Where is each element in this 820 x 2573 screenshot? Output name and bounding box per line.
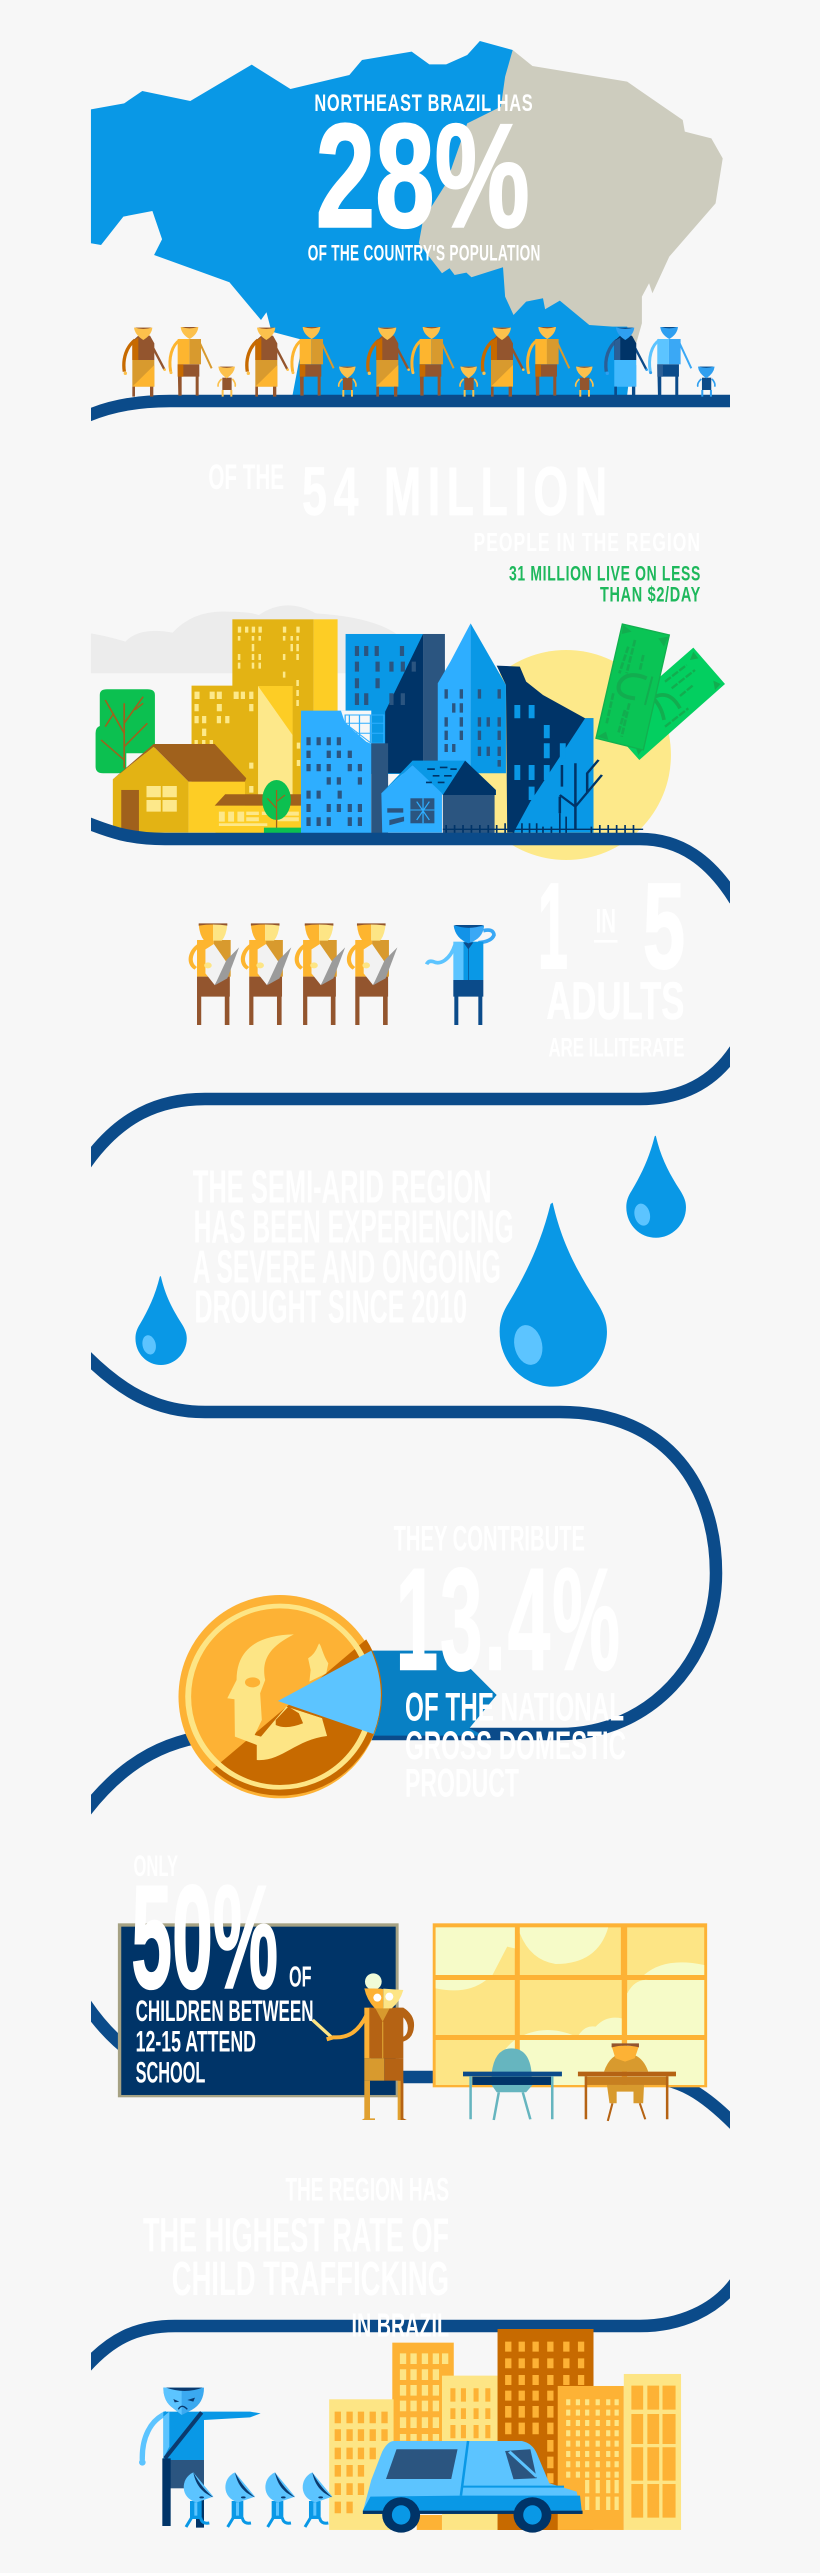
text: of the national gdp: PRODUCT: [405, 1762, 519, 1806]
house: [113, 747, 189, 833]
drought text: [193, 1161, 514, 1333]
panel: illiteracy: [85, 858, 735, 1165]
blue van: [363, 2441, 583, 2533]
text: highest rate: [143, 2209, 449, 2306]
text: children between 12-15 attend school: [136, 1995, 314, 2089]
teacher with pointer: [313, 1973, 414, 2120]
stat: in: IN: [596, 903, 616, 941]
text: highest rate: CHILD TRAFFICKING: [172, 2252, 449, 2306]
text: in brazil: IN BRAZIL: [352, 2307, 449, 2344]
tree: [96, 689, 155, 773]
drought text: THE SEMI-ARID REGION: [193, 1161, 492, 1213]
coin with pie slice: [178, 1595, 382, 1798]
text: adults: ADULTS: [546, 972, 684, 1031]
caption: people in the region: PEOPLE IN THE REGION: [474, 529, 701, 557]
crumbling dark tower: [497, 666, 593, 833]
road line: [85, 401, 735, 417]
green callout: [509, 562, 701, 607]
desk with empty chair: [463, 2048, 562, 2120]
children in a line: [184, 2472, 332, 2527]
city buildings: [329, 2329, 681, 2530]
panel: drought: [85, 1136, 716, 1812]
green callout: THAN $2/DAY: [600, 584, 701, 607]
confused person: [427, 925, 494, 1025]
stat: 28%: 28%: [316, 94, 530, 259]
text: they contribute: THEY CONTRIBUTE: [394, 1520, 585, 1559]
panel: poverty: [85, 453, 735, 900]
text: of the national gdp: [405, 1686, 626, 1806]
drought text: HAS BEEN EXPERIENCING: [194, 1201, 514, 1253]
text: the region has: THE REGION HAS: [285, 2172, 449, 2208]
drought text: DROUGHT SINCE 2010: [194, 1281, 467, 1333]
spire tower: [438, 623, 471, 773]
map of Brazil: [91, 41, 723, 395]
dead tree: [560, 760, 602, 830]
text: of the national gdp: OF THE NATIONAL: [405, 1686, 624, 1730]
fence: [443, 813, 643, 833]
panel: population share: [85, 41, 735, 417]
drought text: A SEVERE AND ONGOING: [193, 1241, 501, 1293]
green callout: 31 MILLION LIVE ON LESS: [509, 562, 701, 585]
cityscape illustration: [91, 605, 671, 860]
panel: gross domestic product: [178, 1520, 626, 1806]
panel: school attendance: 50%: [131, 1856, 278, 2020]
heading: of the: OF THE: [208, 458, 284, 497]
stat: 54 million: 54 MILLION: [302, 453, 614, 530]
stat: 5: 5: [643, 858, 685, 994]
text: children between 12-15 attend school: SCHOOL: [136, 2056, 205, 2089]
heading: northeast brazil has: NORTHEAST BRAZIL HAS: [314, 90, 533, 117]
caption: population: OF THE COUNTRY'S POPULATION: [308, 241, 541, 266]
text: of: OF: [289, 1962, 312, 1994]
blue arrow: [370, 1651, 497, 1736]
window: [433, 1923, 707, 2087]
broken house: [443, 795, 495, 833]
text: of the national gdp: GROSS DOMESTIC: [405, 1724, 626, 1768]
four people reading: [191, 923, 397, 1025]
panel: school attendance: [91, 1923, 730, 2129]
stat: 13.4%: 13.4%: [396, 1538, 622, 1700]
panel: illiteracy: 1: [538, 858, 568, 994]
road line: [85, 822, 735, 900]
text: are illiterate: ARE ILLITERATE: [548, 1033, 684, 1063]
text: highest rate: THE HIGHEST RATE OF: [143, 2209, 449, 2263]
pointing man: [139, 2388, 261, 2528]
row of people: [124, 327, 715, 397]
classroom illustration: [118, 1923, 707, 2121]
text: only: ONLY: [134, 1850, 178, 1883]
blackboard: [118, 1923, 399, 2097]
water drops: [135, 1136, 686, 1387]
small building: [216, 806, 301, 833]
panel: child trafficking: [91, 2279, 730, 2533]
stat: in: [594, 903, 618, 943]
road line: [85, 2003, 735, 2125]
road line: [85, 2283, 735, 2368]
road line: [85, 1050, 735, 1165]
money bills: [596, 624, 725, 760]
road line: [85, 1355, 716, 1812]
text: children between 12-15 attend school: 12-15 ATTEND: [136, 2026, 256, 2059]
blue towers: [346, 634, 423, 774]
text: children between 12-15 attend school: CHILDREN BETWEEN: [136, 1995, 314, 2028]
desk with student: [578, 2043, 676, 2121]
